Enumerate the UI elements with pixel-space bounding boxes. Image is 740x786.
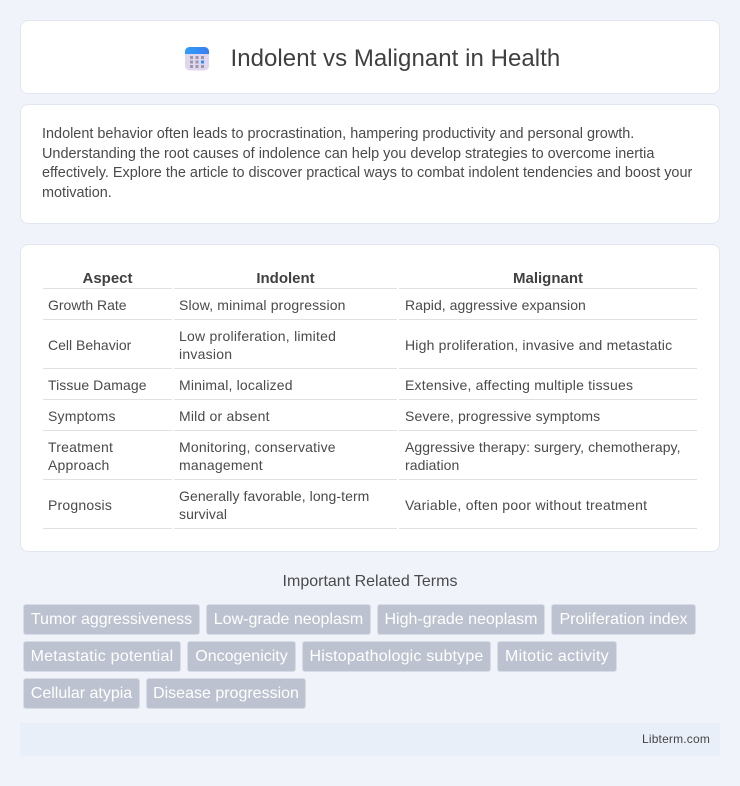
related terms tags: Tumor aggressiveness	[31, 611, 192, 628]
related terms tags: Cellular atypia	[31, 685, 132, 702]
comparison table card: Slow, minimal progression	[179, 297, 346, 313]
related terms tags: Disease progression	[153, 685, 299, 702]
comparison table card: radiation	[405, 457, 459, 473]
comparison table card: Generally favorable, long-term	[179, 488, 369, 504]
related terms tags	[23, 604, 696, 709]
comparison table card: Approach	[48, 457, 110, 473]
comparison table card: Symptoms	[48, 408, 116, 424]
comparison table card: Low proliferation, limited	[179, 328, 336, 344]
related terms tags: Metastatic potential	[31, 648, 173, 665]
intro text: Indolent behavior often leads to procrastination, hampering productivity and personal growth.	[42, 126, 634, 142]
related terms tags: Histopathologic subtype	[309, 648, 484, 665]
related terms tags: Mitotic activity	[505, 648, 609, 665]
intro text: motivation.	[42, 185, 112, 201]
table header: Aspect	[82, 270, 133, 287]
related terms tags: Oncogenicity	[195, 648, 288, 665]
comparison table card: High proliferation, invasive and metastatic	[405, 337, 672, 353]
comparison table card: Tissue Damage	[48, 377, 147, 393]
comparison table card: Variable, often poor without treatment	[405, 497, 647, 513]
comparison table card: Treatment	[48, 439, 113, 455]
comparison table card: Cell Behavior	[48, 337, 131, 353]
comparison table card: Growth Rate	[48, 297, 127, 313]
title: Indolent vs Malignant in Health	[230, 45, 560, 72]
comparison table card: Prognosis	[48, 497, 112, 513]
comparison table card	[20, 244, 720, 552]
related terms tags: Low-grade neoplasm	[214, 611, 363, 628]
footer	[20, 723, 720, 756]
related terms heading: Important Related Terms	[283, 573, 457, 590]
comparison table card: Aggressive therapy: surgery, chemotherapy,	[405, 439, 681, 455]
footer credit: Libterm.com	[642, 732, 710, 746]
comparison table card: Monitoring, conservative	[179, 439, 336, 455]
table header	[82, 270, 583, 287]
table header: Indolent	[256, 270, 315, 287]
table header: Malignant	[513, 270, 583, 287]
intro text: effectively. Explore the article to discover practical ways to combat indolent tendencies and boost your	[42, 165, 692, 181]
header card	[20, 20, 720, 94]
comparison table card: management	[179, 457, 263, 473]
comparison table card: Minimal, localized	[179, 377, 293, 393]
related terms tags: High-grade neoplasm	[384, 611, 537, 628]
intro card	[20, 104, 720, 224]
intro text	[42, 126, 692, 201]
comparison table card: Rapid, aggressive expansion	[405, 297, 586, 313]
comparison table card: survival	[179, 506, 227, 522]
related terms tags: Proliferation index	[559, 611, 688, 628]
comparison table card: Extensive, affecting multiple tissues	[405, 377, 633, 393]
intro text: Understanding the root causes of indolence can help you develop strategies to overcome inertia	[42, 146, 654, 162]
icon: calendar	[185, 47, 209, 70]
comparison table card: Mild or absent	[179, 408, 270, 424]
comparison table card: invasion	[179, 346, 232, 362]
comparison table card: Severe, progressive symptoms	[405, 408, 600, 424]
